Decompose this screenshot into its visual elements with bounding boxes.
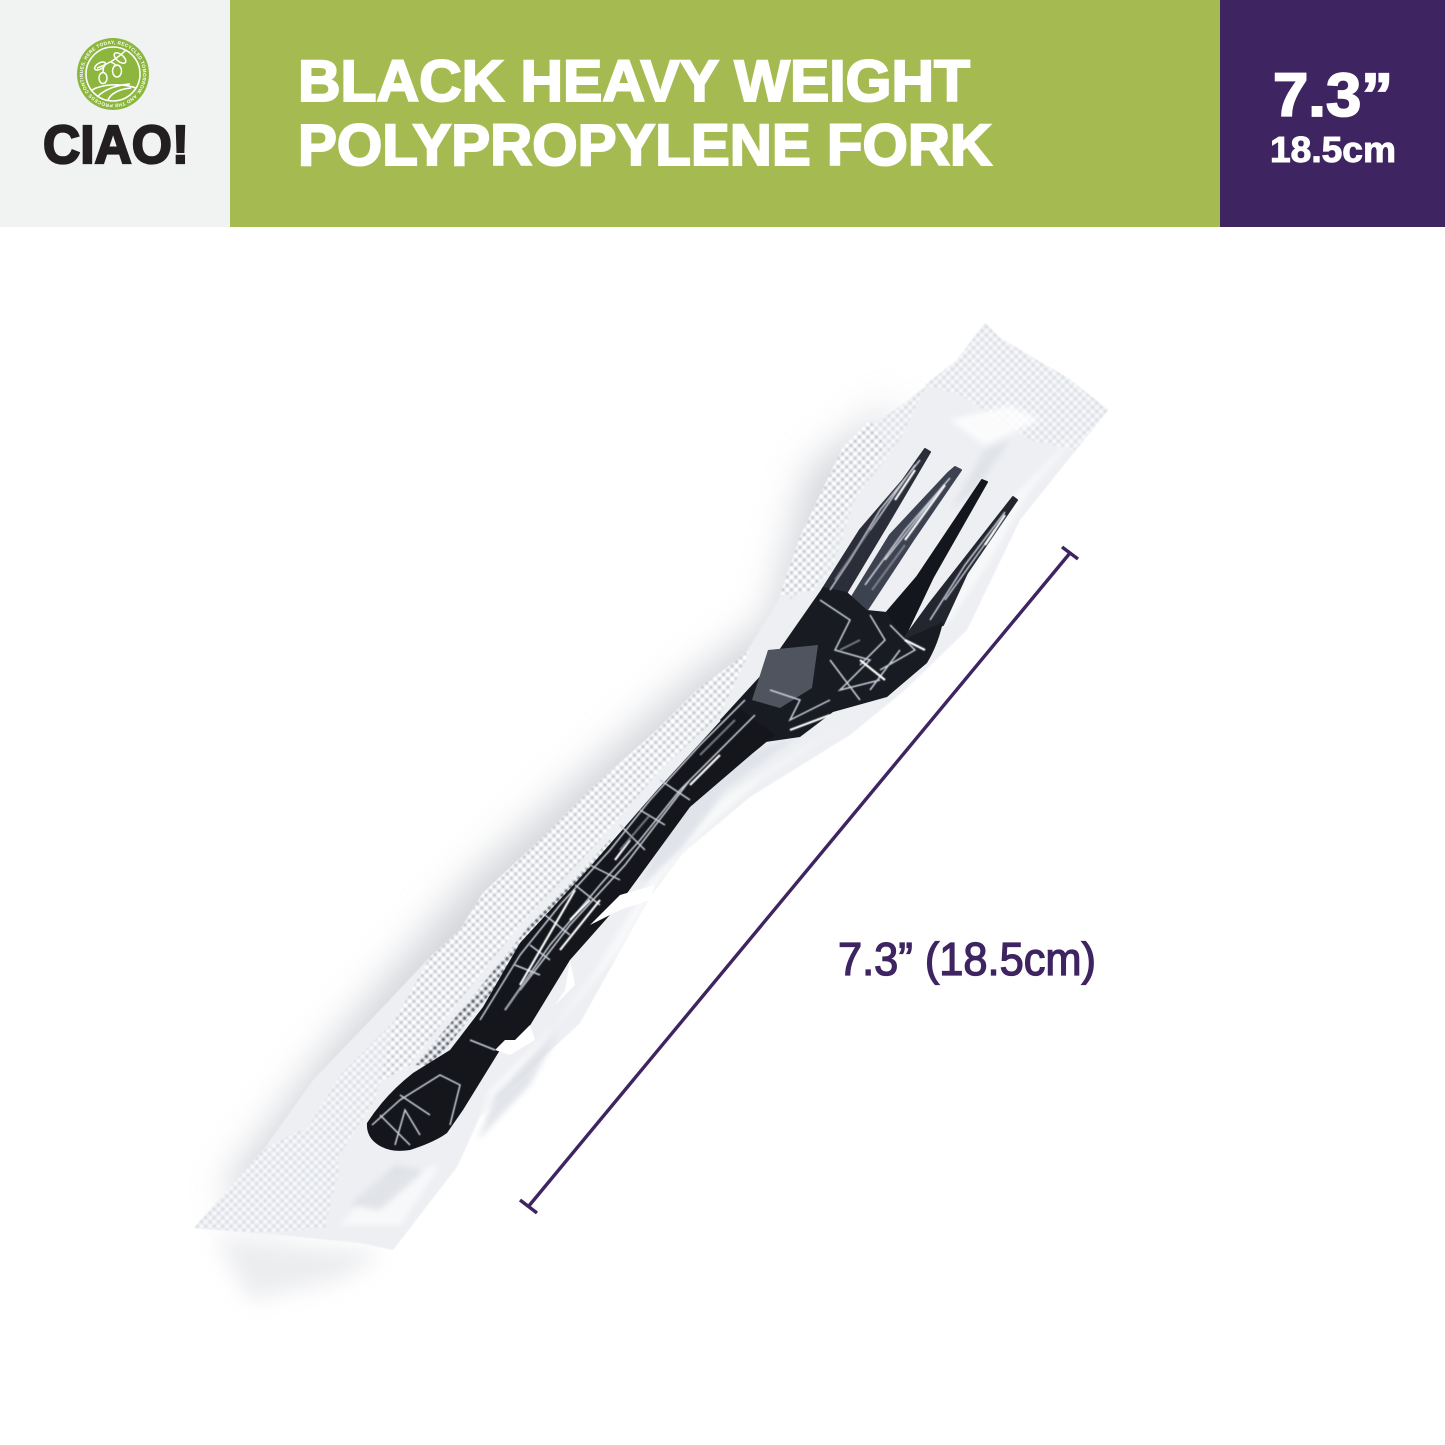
wrinkle reflections bbox=[372, 460, 1005, 1145]
logo wordmark: CIAO! bbox=[43, 115, 189, 175]
logo panel bbox=[0, 0, 230, 227]
film tear highlight bbox=[555, 885, 655, 1005]
title line 2: POLYPROPYLENE FORK bbox=[298, 113, 992, 178]
size badge bbox=[1220, 0, 1445, 227]
fork tines bbox=[822, 449, 1017, 640]
icon: green olive seal: HERE TODAY, RECYCLED TOMORROW. AND THE PROCESS CONTINUES. bbox=[80, 40, 146, 108]
title banner bbox=[230, 0, 1220, 227]
white tear on lower handle bbox=[495, 1025, 535, 1055]
fork handle bbox=[367, 705, 775, 1151]
film highlights bbox=[340, 405, 1090, 1225]
size in centimetres: 18.5cm bbox=[1270, 129, 1396, 170]
dimension label: 7.3” (18.5cm) bbox=[838, 933, 1096, 985]
embossed mesh band bbox=[300, 388, 925, 1170]
size in inches: 7.3” bbox=[1273, 61, 1393, 129]
wrapper end seals bbox=[194, 323, 1108, 1233]
fork head bbox=[720, 587, 943, 745]
black fork bbox=[367, 449, 1017, 1151]
title line 1: BLACK HEAVY WEIGHT bbox=[298, 49, 970, 114]
clear plastic wrapper bbox=[194, 323, 1108, 1250]
soft shadow bbox=[215, 400, 900, 1300]
product photo: wrapped fork bbox=[194, 323, 1108, 1300]
dimension line bbox=[520, 547, 1078, 1213]
